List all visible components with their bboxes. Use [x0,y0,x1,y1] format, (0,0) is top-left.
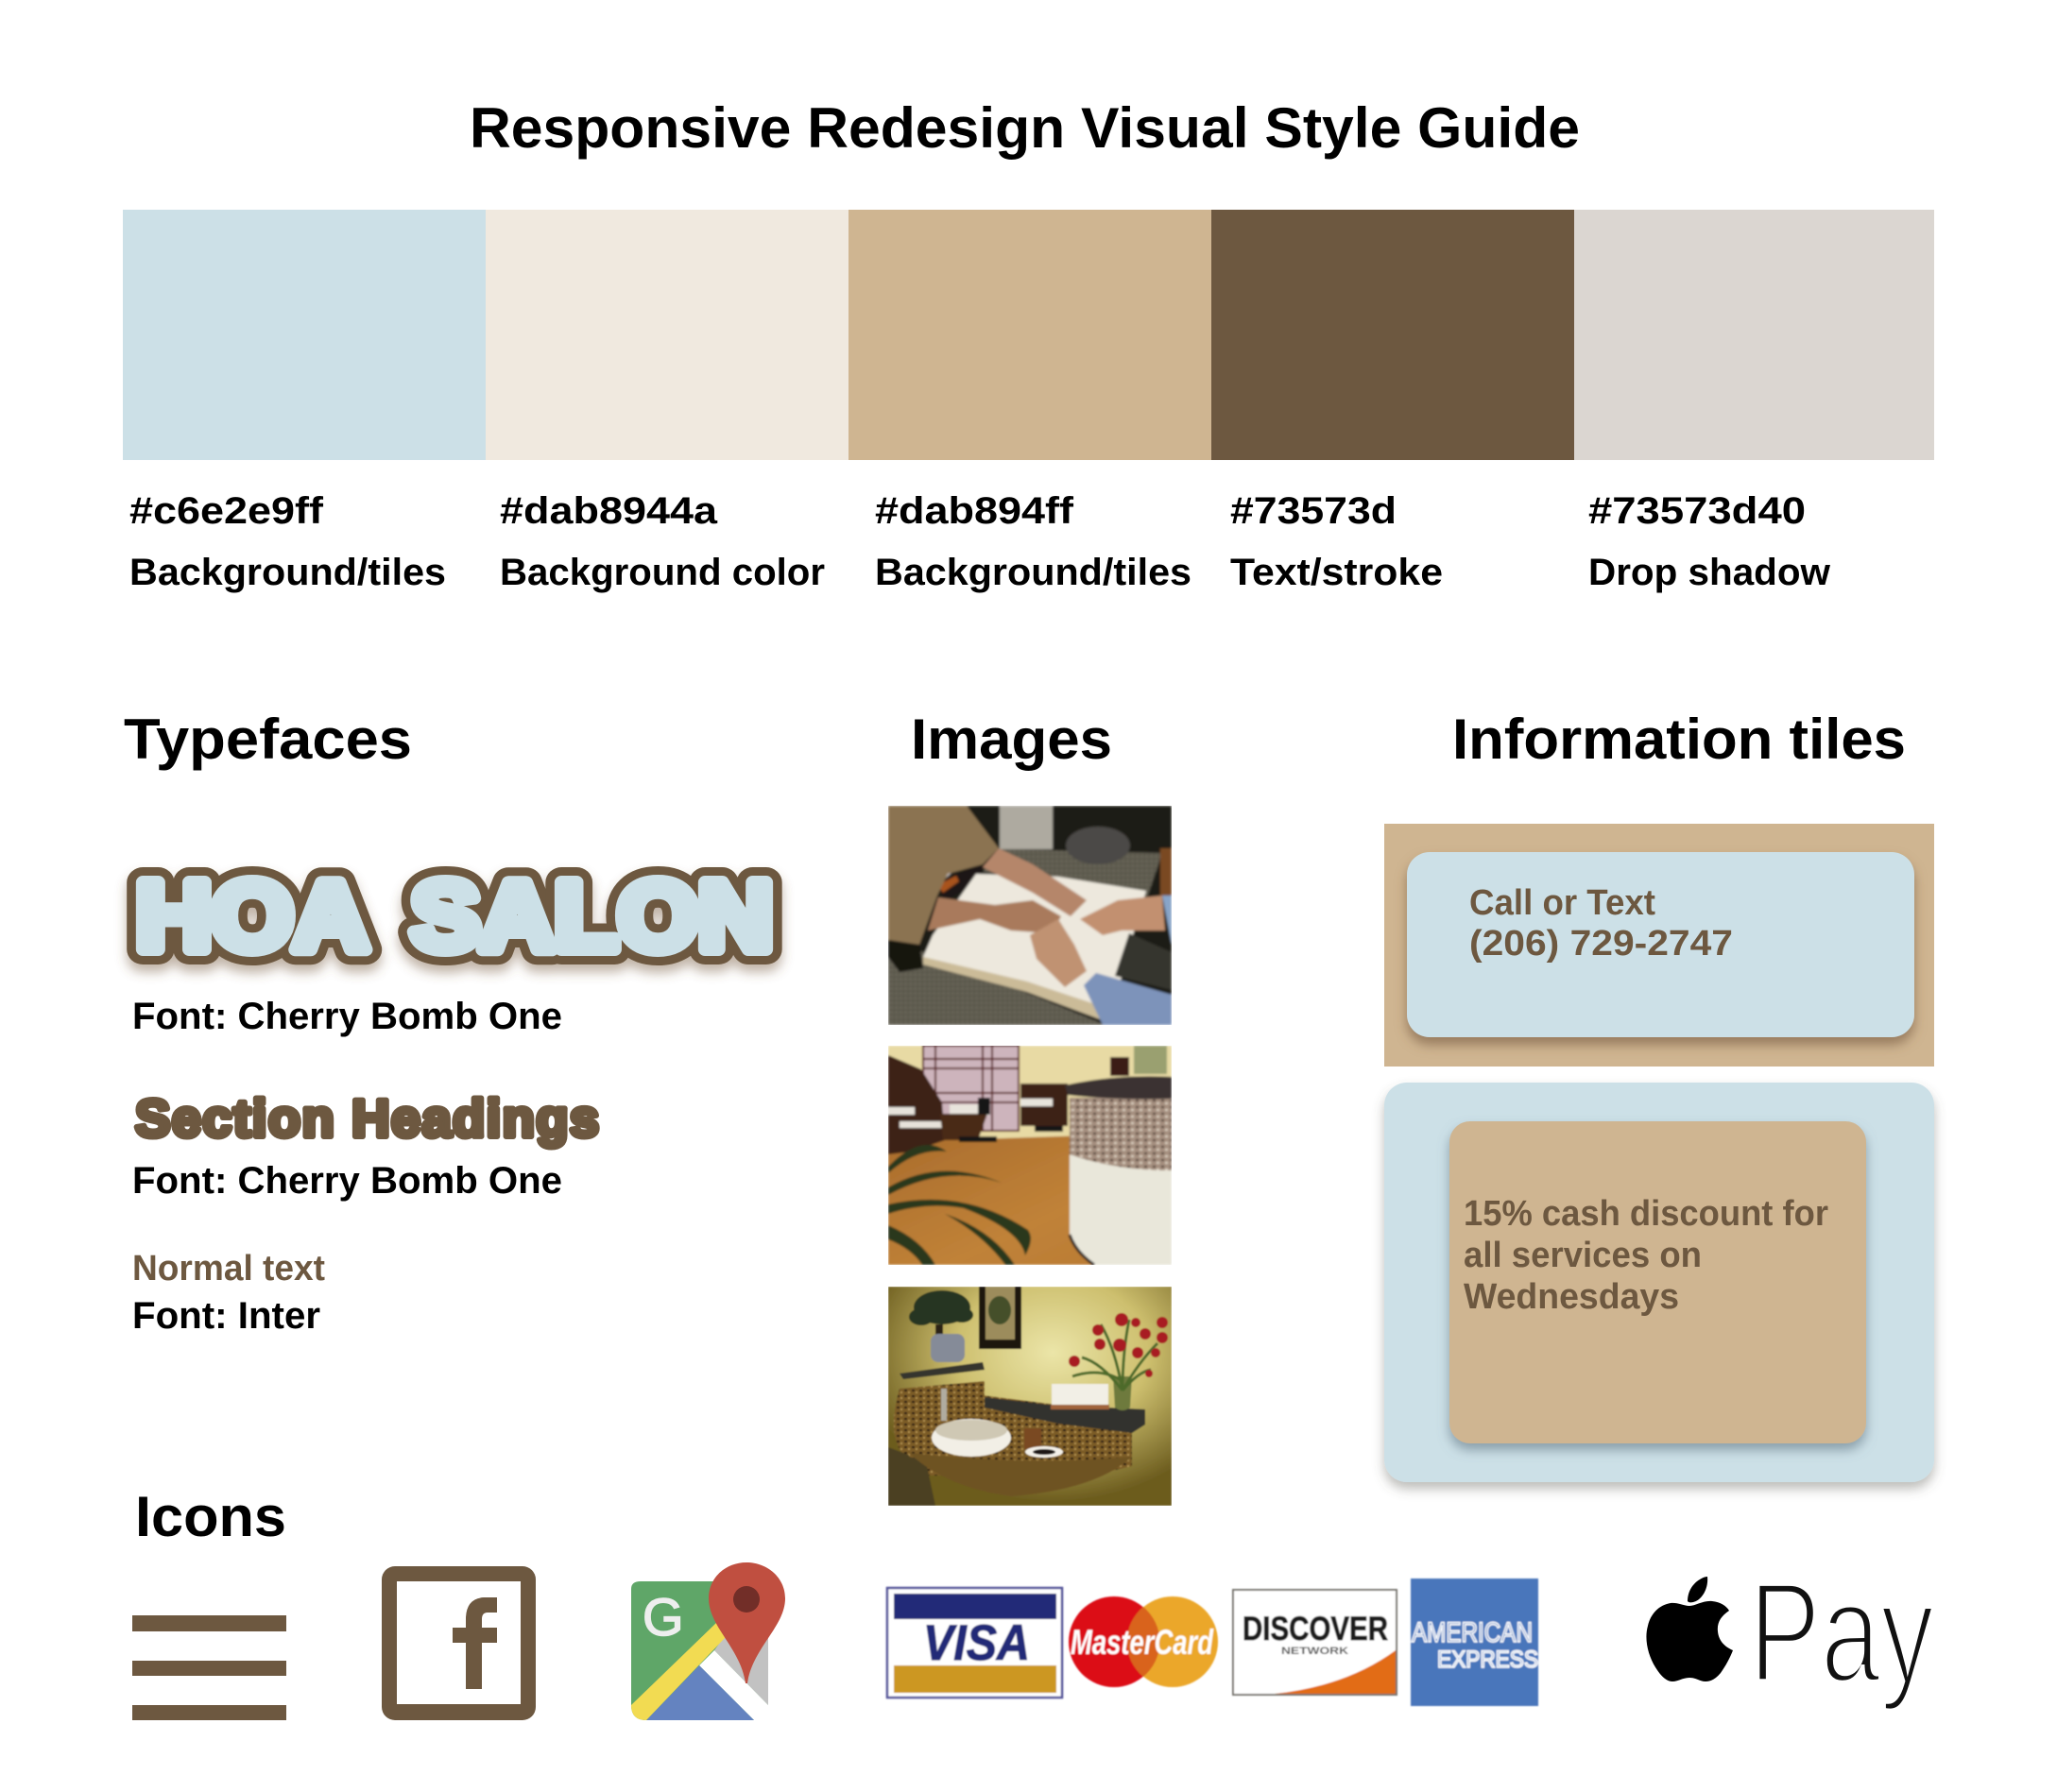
section heading sample: Section Headings [135,1088,599,1148]
logo sample: HOA SALON: SALON [411,862,773,970]
photo: salon interior [888,1046,1172,1265]
tile: cash discount [1384,1083,1934,1482]
icon: discover: DISCOVER [1243,1611,1388,1647]
colour labels: #73573d [1230,490,1397,532]
icon: visa: VISA [923,1615,1030,1671]
icon: facebook [382,1566,536,1720]
tile: cash discount: 15% cash discount for [1464,1194,1828,1234]
font caption: logo: Font: Cherry Bomb One [132,996,562,1037]
icon: google maps: G [643,1587,684,1647]
font caption: normal text: Font: Inter [132,1295,320,1337]
tile: cash discount: all services on [1464,1236,1702,1275]
photo: manicure [888,806,1172,1025]
icon: apple pay: Pay [1749,1552,1934,1712]
icon: american express [1411,1579,1538,1706]
heading: images: Images [911,708,1112,771]
colour labels: #dab8944a [500,490,718,532]
icon: discover: NETWORK [1281,1646,1348,1657]
font caption: section headings: Font: Cherry Bomb One [132,1160,562,1202]
colour palette swatches [123,210,1934,460]
colour labels [129,490,1831,593]
icon: american express: EXPRESS [1437,1647,1538,1673]
tile: cash discount: Wednesdays [1464,1277,1679,1317]
icon: google maps [631,1562,785,1729]
tile: call or text: Call or Text [1469,883,1655,923]
logo sample: HOA SALON [136,862,773,970]
icon: mastercard: MasterCard [1071,1623,1214,1662]
heading: typefaces: Typefaces [124,708,412,771]
icon: hamburger menu [132,1615,286,1720]
heading: information tiles: Information tiles [1452,708,1906,771]
logo sample: HOA SALON: HOA [136,862,369,970]
icon: apple pay [1646,1552,1934,1712]
colour labels: #dab894ff [875,490,1074,532]
colour labels: Background/tiles [875,552,1191,593]
icon: mastercard [1069,1596,1218,1687]
icon: visa [887,1588,1062,1698]
colour labels: Background/tiles [129,552,446,593]
logo sample: HOA SALON: HOA [136,862,369,970]
colour labels: #73573d40 [1588,490,1806,532]
logo sample: HOA SALON: SALON [411,862,773,970]
colour labels: Background color [500,552,825,593]
colour labels: #c6e2e9ff [129,490,324,532]
colour labels: Drop shadow [1588,552,1831,593]
icon: american express: AMERICAN [1412,1617,1533,1648]
normal text sample: Normal text [132,1249,325,1289]
tile: call or text: (206) 729-2747 [1469,924,1733,964]
icon: discover [1233,1590,1397,1695]
title: Responsive Redesign Visual Style Guide [470,96,1580,160]
heading: icons: Icons [135,1485,286,1548]
photo: sink area with tulips [888,1287,1172,1506]
tile: call or text [1384,824,1934,1067]
colour labels: Text/stroke [1230,552,1443,593]
